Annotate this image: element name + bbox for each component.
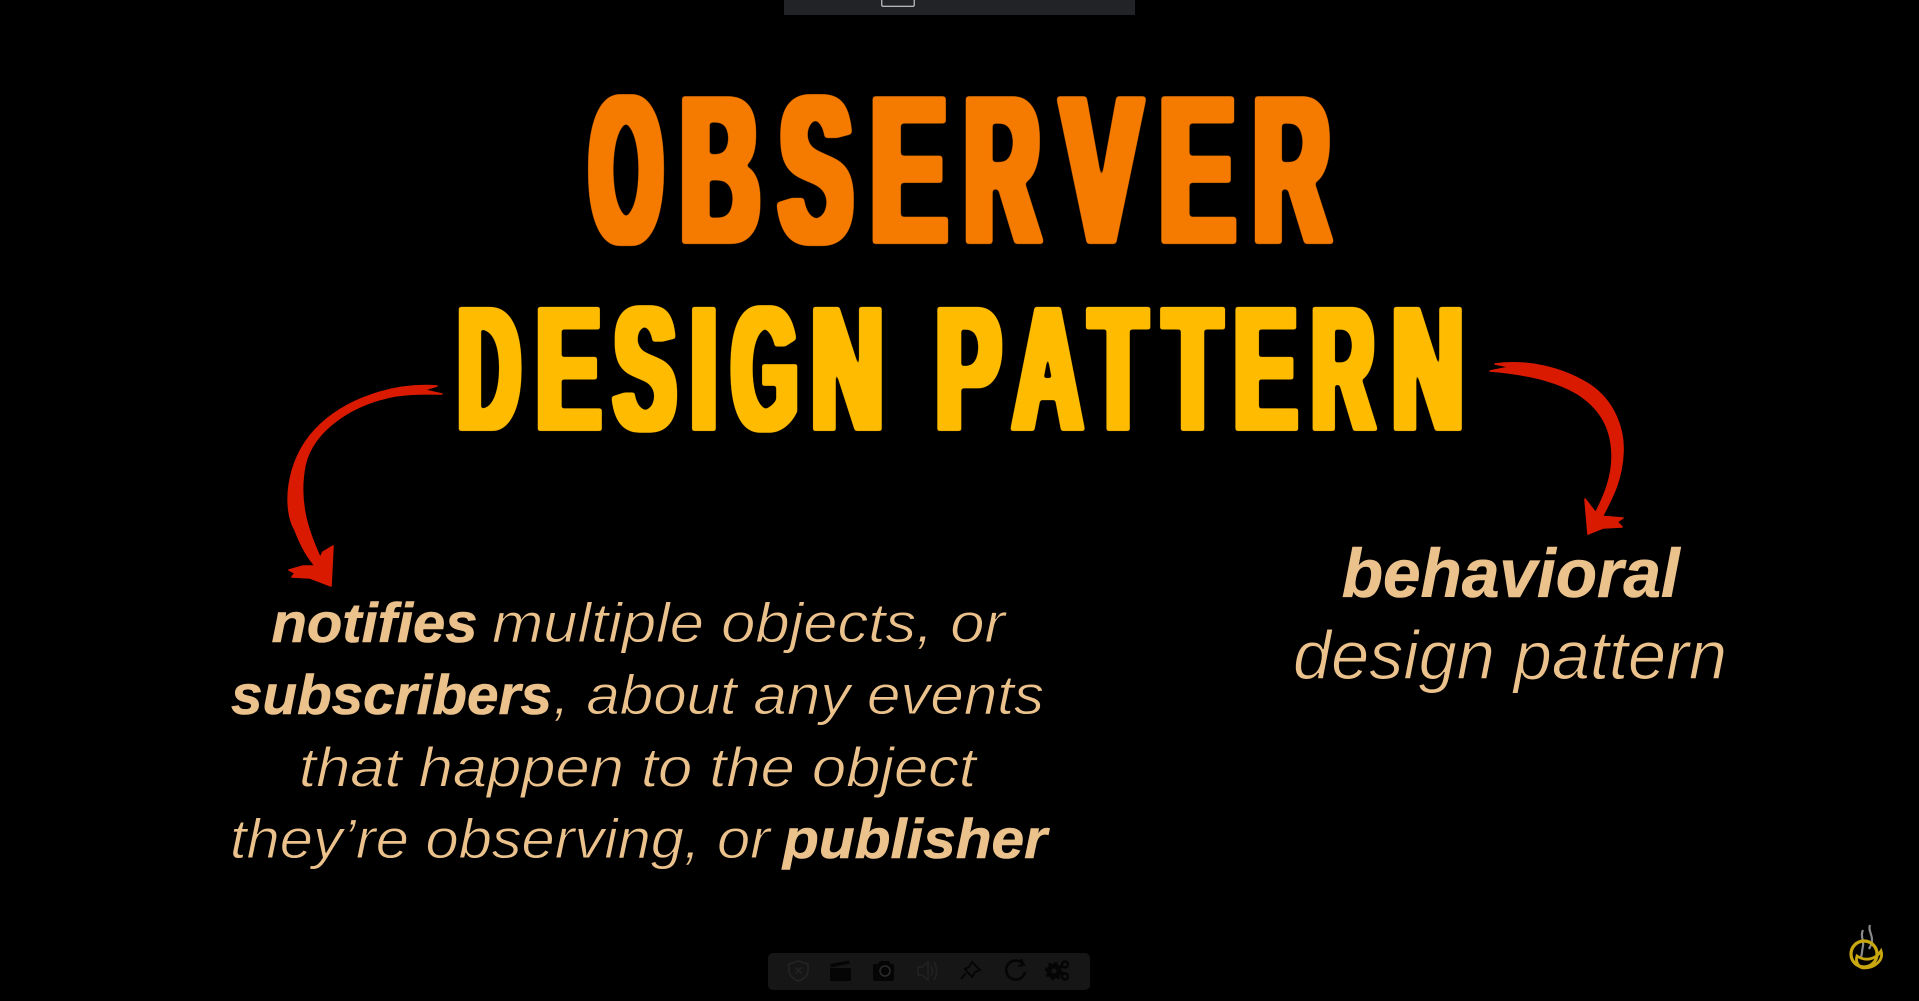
title: OBSERVER: E [1160, 53, 1235, 287]
subtitle: DESIGN PATTERN: T [1164, 270, 1221, 467]
subtitle: DESIGN PATTERN: P [936, 271, 1001, 468]
title: OBSERVER: R [1254, 54, 1330, 288]
subtitle: DESIGN PATTERN: A [1013, 272, 1082, 468]
subtitle: DESIGN PATTERN: D [458, 272, 520, 468]
icon: speaker [918, 962, 936, 980]
text block: behavioral design pattern: design pattern [1293, 617, 1727, 694]
title: OBSERVER: V [1062, 52, 1141, 286]
subtitle: DESIGN PATTERN: N [1392, 272, 1464, 468]
arrow: right red brush arrow [1490, 363, 1623, 534]
subtitle: DESIGN PATTERN: T [1090, 271, 1146, 467]
title: OBSERVER: S [780, 54, 852, 287]
icon: reload [1006, 959, 1025, 980]
text block: observer definition: that happen to the object [299, 736, 979, 798]
text block: observer definition: , about any events [553, 663, 1044, 726]
title: OBSERVER [590, 52, 1330, 288]
subtitle: DESIGN PATTERN: E [536, 272, 601, 468]
icon: clapperboard [830, 960, 851, 981]
text block: observer definition: notifies [272, 591, 478, 654]
title: OBSERVER: R [965, 53, 1040, 286]
text block: observer definition: multiple objects, or [492, 591, 1008, 654]
bottom player toolbar [768, 953, 1090, 990]
text block: behavioral design pattern [1293, 535, 1727, 694]
icon: camera [873, 961, 894, 981]
text block: observer definition: publisher [781, 807, 1050, 870]
subtitle: DESIGN PATTERN: I [691, 272, 717, 468]
icon: shield [789, 961, 808, 981]
subtitle: DESIGN PATTERN [458, 270, 1464, 468]
arrow: left red brush arrow [288, 386, 442, 586]
text block: behavioral design pattern: behavioral [1342, 535, 1681, 612]
title: OBSERVER: B [681, 54, 759, 287]
text block: observer definition: subscribers [231, 663, 552, 726]
icon: steaming cup logo [1851, 925, 1882, 968]
top browser bar [784, 0, 1135, 15]
title: OBSERVER: O [590, 54, 662, 287]
icon: gears [1046, 962, 1068, 980]
title: OBSERVER: E [871, 53, 947, 287]
subtitle: DESIGN PATTERN: S [614, 271, 676, 467]
subtitle: DESIGN PATTERN: R [1312, 272, 1374, 468]
text block: observer definition: they’re observing, or [230, 807, 772, 870]
icon: pin [961, 962, 980, 979]
subtitle: DESIGN PATTERN: E [1234, 270, 1297, 467]
subtitle: DESIGN PATTERN: N [811, 271, 883, 468]
text block: observer definition [230, 591, 1050, 870]
subtitle: DESIGN PATTERN: G [732, 271, 798, 468]
